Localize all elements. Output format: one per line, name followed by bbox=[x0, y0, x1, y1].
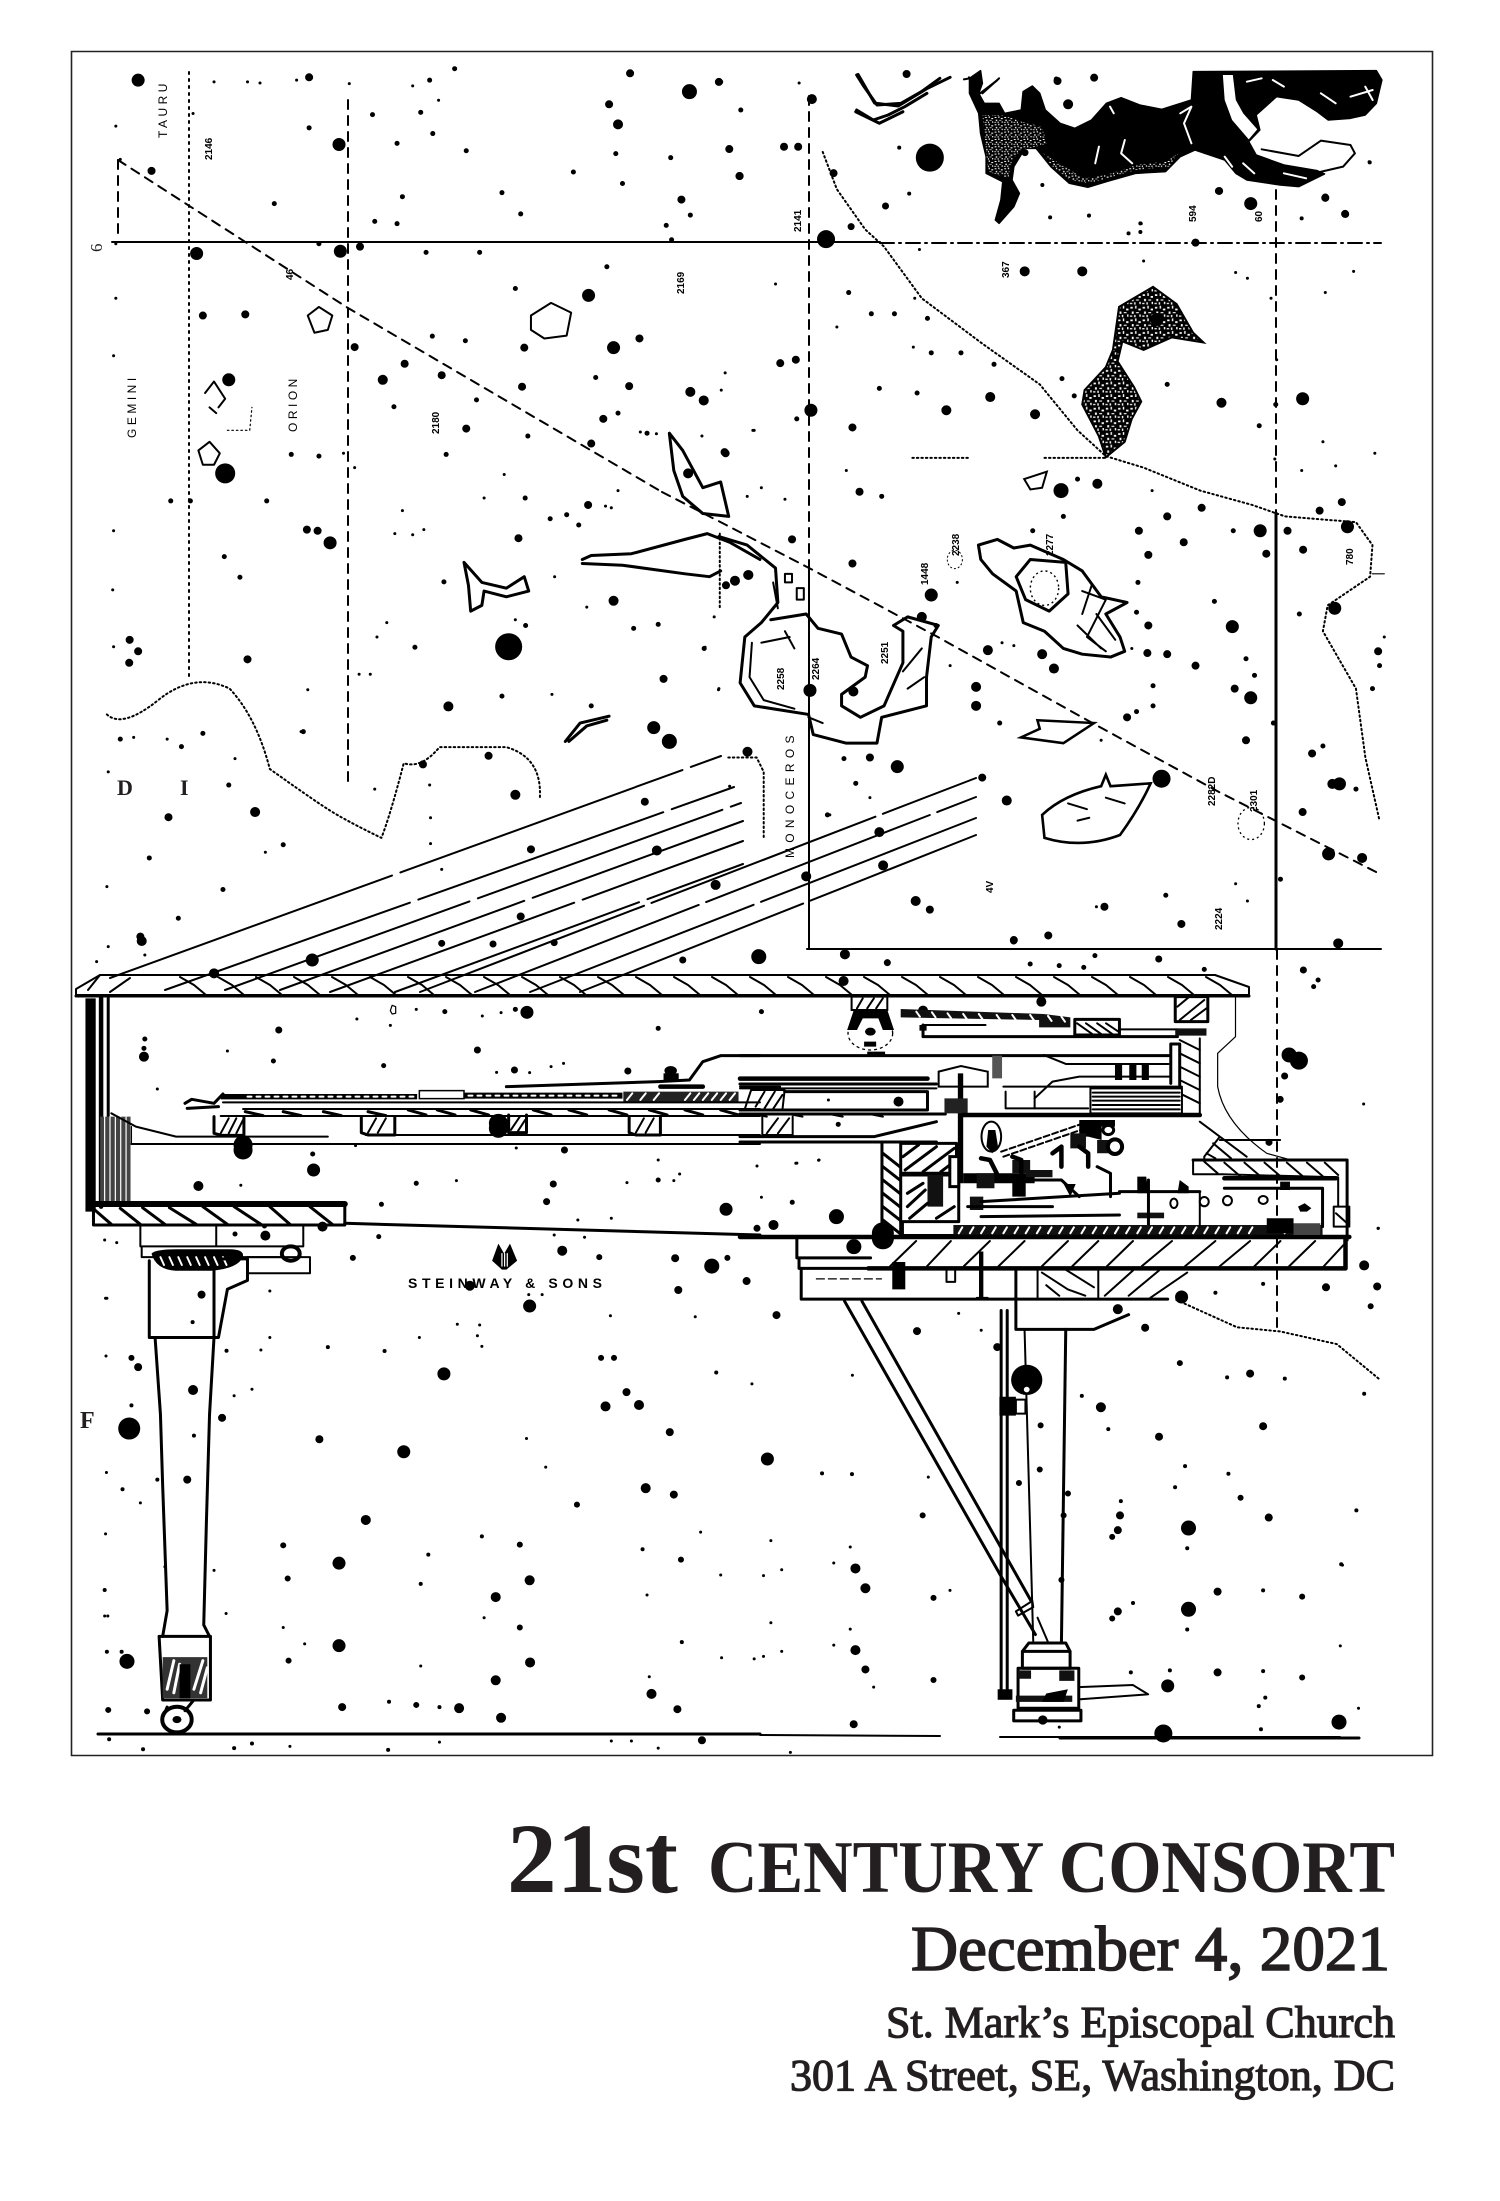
chart labels: ORION bbox=[286, 375, 300, 432]
chart labels: 2238 bbox=[951, 533, 962, 556]
chart labels: 2251 bbox=[880, 641, 891, 664]
piano lid bbox=[76, 975, 1249, 996]
chart labels: 2141 bbox=[793, 209, 804, 232]
stars: lower left chart bbox=[105, 1251, 754, 1750]
chart labels bbox=[80, 80, 1356, 1434]
chart labels: 780 bbox=[1345, 548, 1356, 565]
plate strip bbox=[185, 1056, 760, 1108]
main rod bbox=[958, 1073, 963, 1183]
chart labels: 2224 bbox=[1214, 907, 1225, 930]
nebula: monoceros ring bbox=[719, 537, 938, 743]
concert title: CENTURY CONSORT bbox=[708, 1827, 1395, 1909]
stars: upper left chart bbox=[107, 69, 754, 937]
chart labels: 1448 bbox=[920, 562, 931, 585]
chart labels: 367 bbox=[1001, 261, 1012, 278]
music desk bbox=[901, 1009, 1177, 1037]
chart labels: 2282D bbox=[1207, 777, 1218, 806]
chart labels: 594 bbox=[1188, 205, 1199, 222]
chart labels: 2277 bbox=[1045, 533, 1056, 556]
concert date: December 4, 2021 bbox=[911, 1914, 1390, 1984]
nebula: upper left wisp bbox=[856, 74, 997, 123]
pin block line bbox=[963, 1113, 1200, 1117]
trap lever and bracket bbox=[816, 1279, 1129, 1329]
key bed and lyre bbox=[797, 1225, 1345, 1725]
rod collar bbox=[944, 1098, 968, 1113]
chart labels: D bbox=[117, 775, 133, 800]
chart labels: 2146 bbox=[204, 137, 215, 160]
brace strip bbox=[221, 1109, 760, 1116]
floor line bbox=[98, 1734, 1359, 1738]
lower beam bbox=[93, 1204, 760, 1235]
keybed strip bbox=[740, 1222, 1349, 1237]
chart labels: F bbox=[80, 1408, 95, 1434]
nebula: wedge bbox=[1021, 720, 1094, 743]
diagonal brace bbox=[845, 1301, 1048, 1643]
string bands bbox=[110, 756, 976, 992]
nebula: lower cloud bbox=[1042, 775, 1151, 843]
chart labels: 4V bbox=[985, 880, 996, 893]
pedal box bbox=[998, 1643, 1148, 1725]
chart labels: 46 bbox=[285, 268, 296, 280]
key slip and fallboard bbox=[1170, 1122, 1349, 1240]
star chart bbox=[80, 69, 1384, 1752]
chart labels: TAURU bbox=[156, 80, 170, 138]
nebulae outlines bbox=[198, 74, 1384, 843]
hatch blocks under action bbox=[882, 1143, 959, 1237]
key bed bbox=[797, 1225, 1345, 1299]
image frame bbox=[72, 52, 1432, 1756]
chart labels: 2301 bbox=[1249, 789, 1260, 812]
chart labels: 6 bbox=[87, 244, 106, 252]
nebula: small clouds bbox=[198, 303, 609, 741]
stars: upper right chart bbox=[714, 77, 1384, 940]
pedal rods and lyre posts bbox=[999, 1310, 1066, 1689]
concert title bbox=[507, 1803, 1395, 1914]
chart labels: 2264 bbox=[811, 657, 822, 680]
piano rim, soundboard and plate bbox=[85, 998, 760, 1235]
chart labels: GEMINI bbox=[125, 374, 139, 438]
chart labels: I bbox=[180, 775, 189, 800]
milky way dotted boundaries bbox=[107, 152, 1380, 1380]
lyre logo bbox=[492, 1244, 517, 1270]
chart labels: MONOCEROS bbox=[783, 732, 797, 858]
bass action bbox=[963, 1120, 1200, 1227]
tapered leg bbox=[155, 1337, 214, 1636]
nebula: cross shaped cloud bbox=[1082, 287, 1204, 457]
stars: lower right chart bbox=[763, 1160, 1378, 1752]
front leg assembly bbox=[140, 1225, 517, 1732]
concert title: 21st bbox=[507, 1803, 678, 1914]
chart labels: 2180 bbox=[431, 411, 442, 434]
venue name: St. Mark’s Episcopal Church bbox=[886, 1998, 1395, 2047]
right lid block bbox=[1175, 997, 1294, 1161]
upper plate and dampers bbox=[740, 1038, 1200, 1142]
nebula: long arm bbox=[582, 534, 760, 608]
treble case, action and keyboard bbox=[740, 997, 1349, 1240]
piano bbox=[76, 975, 1359, 1738]
chart labels: 2258 bbox=[776, 667, 787, 690]
nebula: top right dark cloud bbox=[851, 71, 1382, 233]
venue address: 301 A Street, SE, Washington, DC bbox=[790, 2051, 1395, 2100]
maker name: STEINWAY & SONS bbox=[408, 1275, 602, 1291]
nebula: rosette bbox=[978, 539, 1127, 657]
nebula: small blob bbox=[1024, 472, 1047, 489]
chart labels: 60 bbox=[1254, 210, 1265, 222]
nebula: upper lobe bbox=[669, 433, 729, 516]
chart labels: 2169 bbox=[676, 271, 687, 294]
stars: behind piano case bbox=[97, 941, 1378, 1257]
beam blocks bbox=[214, 1066, 703, 1135]
caster bbox=[159, 1636, 210, 1732]
lid prop bbox=[847, 997, 894, 1056]
chart grid lines bbox=[112, 72, 1381, 1332]
